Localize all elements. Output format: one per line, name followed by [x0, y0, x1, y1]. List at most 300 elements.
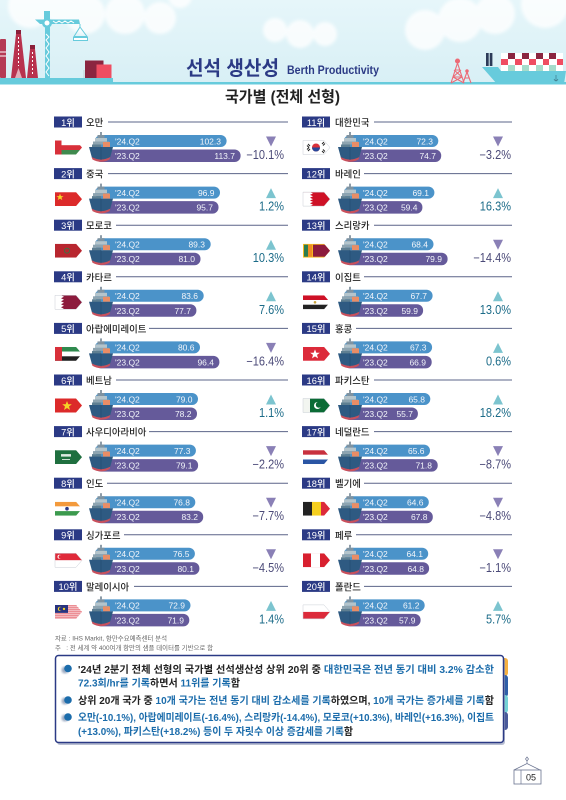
bar: 2024 Q2: 79.0 [176, 394, 193, 404]
page number tag [514, 757, 541, 784]
change: -10.1%: −10.1% [246, 148, 284, 162]
icon: ship [89, 235, 113, 265]
bar: 2024 Q2 [95, 393, 198, 405]
row: 6위 베트남 [54, 374, 288, 420]
change: 18.2% [480, 394, 511, 420]
bar: 2023 Q2: 113.7 [214, 151, 235, 161]
country name: 싱가포르 [86, 530, 121, 541]
bar: 2024 Q2 [344, 187, 434, 199]
bar: 2023 Q2: 95.7 [196, 203, 213, 213]
bar: 2024 Q2 [344, 135, 438, 147]
bar: 2024 Q2: 72.9 [168, 601, 185, 611]
change: -4.5%: −4.5% [252, 561, 284, 575]
ground strip [0, 82, 566, 84]
bar: 2024 Q2: 89.3 [188, 240, 205, 250]
change: 1.4%: 1.4% [259, 612, 284, 626]
country name: 사우디아라비아 [86, 427, 147, 438]
row: 19위 페루 [302, 529, 512, 575]
rank badge: 5위 [61, 323, 75, 334]
rank badge [54, 323, 82, 334]
change: 10.3% [253, 240, 284, 265]
bar: 2024 Q2: '24.Q2 [115, 601, 140, 611]
flag: Egypt [303, 295, 330, 309]
bar: 2023 Q2: '23.Q2 [363, 306, 388, 316]
callout tabs [500, 658, 508, 730]
title: 선석 생산성 [186, 57, 279, 80]
bar: 2024 Q2 [344, 238, 434, 250]
rank badge [302, 323, 330, 334]
bar: 2024 Q2: '24.Q2 [363, 240, 388, 250]
title [186, 57, 380, 80]
icon: ship [338, 338, 362, 368]
rank badge [302, 581, 330, 592]
bar: 2024 Q2 [95, 599, 190, 611]
icon: ship [338, 235, 362, 265]
title: Berth Productivity [287, 65, 380, 77]
bar: 2023 Q2: '23.Q2 [115, 254, 140, 264]
bar: 2024 Q2: '24.Q2 [363, 291, 388, 301]
rank badge: 15위 [307, 323, 325, 334]
icon: harbor crane [35, 11, 88, 78]
change: 13.0% [480, 291, 511, 317]
rank badge: 6위 [61, 375, 75, 386]
bar: 2024 Q2 [95, 496, 195, 508]
bar: 2023 Q2: '23.Q2 [363, 461, 388, 471]
rank badge: 19위 [307, 530, 325, 541]
flag: Pakistan [303, 398, 330, 412]
row: 8위 인도 [54, 478, 288, 523]
bar: 2023 Q2 [95, 304, 196, 317]
change: 13.0%: 13.0% [480, 303, 511, 317]
bar: 2024 Q2: '24.Q2 [363, 136, 388, 146]
bar: 2024 Q2 [344, 496, 429, 508]
icon: ship [338, 132, 362, 162]
icon: ship [89, 184, 113, 213]
bar: 2023 Q2 [344, 562, 429, 575]
rank badge: 18위 [307, 478, 325, 489]
flag: Oman [55, 140, 82, 155]
country name: 아랍에미레이트 [86, 323, 147, 334]
change: -14.4%: −14.4% [473, 251, 511, 265]
flag: Vietnam [55, 398, 82, 412]
icon: ship [89, 338, 113, 368]
bar: 2024 Q2: '24.Q2 [115, 343, 140, 353]
finding 1 [78, 663, 495, 690]
country name: 말레이시아 [86, 581, 130, 592]
rank badge: 8위 [61, 478, 75, 489]
rank badge [302, 374, 330, 386]
bar: 2023 Q2 [344, 356, 432, 368]
row: 5위 아랍에미레이트 [54, 323, 288, 368]
country name: 홍콩 [335, 323, 353, 334]
change: 7.6%: 7.6% [259, 303, 284, 317]
change: 7.6% [259, 291, 284, 317]
bar: 2024 Q2 [344, 341, 432, 353]
bar: 2023 Q2: 96.4 [197, 357, 214, 367]
flag: China [55, 192, 82, 206]
rank badge [302, 478, 330, 489]
bar: 2023 Q2: '23.Q2 [363, 564, 388, 574]
country name: 스리랑카 [335, 220, 370, 231]
rank badge [54, 220, 82, 231]
bar: 2023 Q2 [344, 304, 423, 317]
bar: 2023 Q2: 66.9 [409, 357, 426, 367]
bar: 2024 Q2 [95, 238, 211, 250]
bar: 2023 Q2 [95, 150, 241, 162]
icon: ship [89, 287, 113, 317]
change: -1.1%: −1.1% [480, 561, 511, 575]
bar: 2023 Q2: '23.Q2 [115, 461, 140, 471]
flag: UAE [55, 347, 82, 361]
bar: 2023 Q2 [95, 511, 203, 523]
source notes: 주 : 전 세계 약 400여개 항만의 샘플 데이터를 기반으로 함 [55, 643, 213, 652]
row: 10위 말레이시아 [54, 581, 288, 626]
bar: 2023 Q2: 55.7 [396, 409, 413, 419]
row: 2위 중국 [54, 168, 288, 214]
bar: 2024 Q2: 102.3 [200, 136, 221, 146]
country name: 이집트 [335, 272, 361, 283]
finding 2: 상위 20개 국가 중 10개 국가는 전년 동기 대비 감소세를 기록하였으며, 10개 국가는 증가세를 기록함 [78, 694, 495, 707]
bar: 2023 Q2: 79.9 [425, 254, 442, 264]
icon: ship [338, 287, 362, 317]
bar: 2023 Q2 [344, 253, 448, 265]
flag: Singapore [55, 553, 82, 567]
bar: 2023 Q2: '23.Q2 [115, 512, 140, 522]
row: 20위 폴란드 [302, 581, 512, 626]
rank badge: 12위 [307, 168, 325, 179]
header banner [0, 0, 566, 84]
rank badge [54, 426, 82, 437]
rank badge [302, 426, 330, 437]
bar: 2024 Q2 [95, 135, 227, 147]
bar: 2024 Q2 [95, 341, 200, 353]
change: -7.7% [252, 498, 284, 523]
country name: 네덜란드 [335, 427, 370, 438]
bar: 2024 Q2: '24.Q2 [363, 188, 388, 198]
change: 1.2% [259, 188, 284, 214]
bar: 2024 Q2: 65.6 [408, 446, 425, 456]
bar: 2023 Q2: '23.Q2 [363, 409, 388, 419]
change: -10.1% [246, 136, 284, 162]
bar: 2023 Q2: '23.Q2 [363, 512, 388, 522]
bar: 2024 Q2: 76.5 [173, 549, 190, 559]
country name: 페루 [335, 530, 353, 541]
bar: 2024 Q2: 67.7 [410, 291, 427, 301]
rank badge [302, 168, 330, 179]
rank badge: 7위 [61, 426, 75, 437]
change: -4.8%: −4.8% [480, 509, 511, 523]
icon: ship [89, 390, 113, 420]
bar: 2023 Q2 [95, 562, 199, 575]
change: -4.5% [252, 549, 284, 575]
country name: 바레인 [335, 169, 361, 180]
flag: India [55, 502, 82, 516]
bar: 2024 Q2: '24.Q2 [115, 188, 140, 198]
flag: Netherlands [303, 450, 330, 464]
flag: Qatar [55, 295, 82, 309]
bar: 2023 Q2: '23.Q2 [363, 357, 388, 367]
row: 11위 대한민국 [302, 116, 512, 162]
bar: 2023 Q2: 81.0 [178, 254, 195, 264]
rank badge [54, 168, 82, 179]
change: 5.7%: 5.7% [486, 612, 511, 626]
bar: 2023 Q2: 74.7 [419, 151, 436, 161]
icon: ship [338, 390, 362, 420]
row: 14위 이집트 [302, 271, 512, 317]
source notes [55, 634, 213, 652]
rank badge: 14위 [307, 272, 325, 283]
country name: 카타르 [86, 272, 112, 283]
flag: South Korea [303, 140, 330, 154]
icon: ship [89, 493, 113, 523]
icon: ship [338, 493, 362, 523]
country name: 대한민국 [335, 117, 370, 128]
bar: 2023 Q2: 80.1 [177, 564, 194, 574]
rank badge [54, 478, 82, 489]
change: -2.2% [252, 446, 284, 472]
bar: 2023 Q2: 59.9 [401, 306, 418, 316]
bar: 2023 Q2: 83.2 [181, 512, 198, 522]
change: 16.3% [480, 188, 511, 214]
country name: 폴란드 [335, 581, 361, 592]
bar: 2024 Q2 [95, 445, 196, 457]
bar: 2023 Q2 [344, 201, 422, 214]
icon: container ship [482, 53, 566, 84]
bar: 2023 Q2: '23.Q2 [115, 357, 140, 367]
rank badge: 1위 [61, 117, 75, 128]
finding 1: '24년 2분기 전체 선형의 국가별 선석생산성 상위 20위 중 대한민국은 전년 동기 대비 3.2% 감소한 [78, 663, 495, 676]
change: 0.6% [486, 343, 511, 368]
bar: 2023 Q2: '23.Q2 [363, 151, 388, 161]
icon: stacked containers [83, 60, 112, 78]
change: 16.3%: 16.3% [480, 200, 511, 214]
bar: 2023 Q2 [344, 408, 418, 420]
bar: 2024 Q2: '24.Q2 [115, 136, 140, 146]
bar: 2024 Q2 [344, 599, 425, 611]
bar: 2024 Q2: 64.6 [407, 498, 424, 508]
bar: 2023 Q2: '23.Q2 [115, 615, 140, 625]
row: 13위 스리랑카 [302, 220, 512, 265]
bar: 2024 Q2: 67.3 [410, 343, 427, 353]
bar: 2023 Q2: 71.8 [415, 461, 432, 471]
bar: 2023 Q2 [95, 356, 219, 368]
bar: 2023 Q2: '23.Q2 [363, 615, 388, 625]
bar: 2023 Q2: 77.7 [174, 306, 191, 316]
finding 3 [78, 711, 494, 738]
rank badge: 3위 [61, 220, 75, 231]
bar: 2023 Q2 [344, 150, 441, 162]
country name: 모로코 [86, 220, 112, 231]
rank badge [302, 529, 330, 541]
bar: 2023 Q2 [344, 511, 433, 523]
flag: Malaysia [55, 605, 82, 619]
flag: Hong Kong [303, 347, 330, 361]
row: 16위 파키스탄 [302, 374, 512, 420]
rank badge [54, 116, 82, 128]
rank badge: 20위 [307, 581, 325, 592]
rank badge [54, 581, 82, 592]
flag: Peru [303, 553, 330, 567]
bar: 2024 Q2: 65.8 [408, 394, 425, 404]
finding 3: (+13.0%), 파키스탄(+18.2%) 등이 두 자릿수 이상 증감세를 기록함 [78, 725, 353, 738]
bar: 2023 Q2: '23.Q2 [115, 306, 140, 316]
change: -3.2%: −3.2% [480, 148, 511, 162]
flag: Saudi Arabia [55, 450, 82, 464]
bar: 2024 Q2: '24.Q2 [115, 549, 140, 559]
clouds [8, 0, 566, 50]
icon: ship [338, 184, 362, 213]
change: 10.3%: 10.3% [253, 251, 284, 265]
icon: ship [338, 442, 362, 471]
change: -2.2%: −2.2% [252, 458, 284, 472]
bar: 2023 Q2: '23.Q2 [115, 409, 140, 419]
change: 1.1%: 1.1% [259, 406, 284, 420]
bar: 2023 Q2: '23.Q2 [363, 203, 388, 213]
change: -3.2% [480, 136, 511, 162]
row: 17위 네덜란드 [302, 426, 512, 472]
bar: 2024 Q2: '24.Q2 [363, 601, 388, 611]
bar: 2023 Q2: 64.8 [407, 564, 424, 574]
bar: 2024 Q2 [95, 290, 204, 302]
bar: 2023 Q2: '23.Q2 [363, 254, 388, 264]
bar: 2023 Q2: 67.8 [411, 512, 428, 522]
rank badge: 16위 [307, 375, 325, 386]
bar: 2023 Q2: 71.9 [167, 615, 184, 625]
change: 1.1% [259, 394, 284, 420]
bar: 2023 Q2: 78.2 [175, 409, 192, 419]
row: 4위 카타르 [54, 271, 288, 317]
rank badge: 17위 [307, 426, 325, 437]
bar: 2024 Q2: 69.1 [412, 188, 429, 198]
bar: 2023 Q2 [344, 459, 438, 472]
flag: Bahrain [303, 192, 330, 206]
flag: Morocco [55, 244, 82, 258]
bar: 2024 Q2: 72.3 [416, 136, 433, 146]
country name: 인도 [86, 478, 104, 489]
rank badge: 9위 [61, 530, 75, 541]
icon: ship [89, 545, 113, 575]
change: 1.2%: 1.2% [259, 200, 284, 214]
source notes: 자료 : IHS Markit, 항만수요예측센터 분석 [55, 634, 167, 642]
finding 1: 72.3회/hr를 기록하면서 11위를 기록함 [78, 676, 241, 690]
rank badge: 11위 [307, 117, 325, 128]
icon: radio towers [451, 59, 471, 83]
icon: ship [89, 442, 113, 471]
bar: 2024 Q2: 96.9 [198, 188, 215, 198]
bar: 2023 Q2: 57.9 [399, 615, 416, 625]
bar: 2024 Q2: 68.4 [411, 240, 428, 250]
bar: 2024 Q2: '24.Q2 [115, 291, 140, 301]
bar: 2024 Q2: '24.Q2 [363, 394, 388, 404]
bar: 2023 Q2 [95, 253, 200, 265]
rank badge [302, 271, 330, 283]
bar: 2023 Q2 [95, 201, 218, 214]
rank badge [54, 374, 82, 386]
bar: 2024 Q2 [344, 445, 430, 457]
change: -14.4% [473, 240, 511, 265]
flag: Belgium [303, 502, 330, 516]
rank badge: 10위 [59, 581, 77, 592]
row: 12위 바레인 [302, 168, 512, 214]
change: -7.7%: −7.7% [252, 509, 284, 523]
country name: 베트남 [86, 375, 112, 386]
country name: 벨기에 [335, 478, 361, 489]
rank badge [54, 271, 82, 283]
icon: ship [338, 545, 362, 575]
bar: 2023 Q2: '23.Q2 [115, 564, 140, 574]
row: 1위 오만 [54, 116, 288, 162]
row: 15위 홍콩 [302, 323, 512, 368]
rank badge: 13위 [307, 220, 325, 231]
bar: 2024 Q2: '24.Q2 [363, 549, 388, 559]
change: 0.6%: 0.6% [486, 354, 511, 368]
country name: 파키스탄 [335, 375, 370, 386]
flag: Sri Lanka [303, 244, 330, 258]
bar: 2024 Q2: '24.Q2 [363, 446, 388, 456]
country name: 중국 [86, 169, 104, 180]
bar: 2024 Q2: '24.Q2 [115, 240, 140, 250]
bar: 2024 Q2: 77.3 [174, 446, 191, 456]
bar: 2024 Q2: '24.Q2 [115, 446, 140, 456]
bar: 2024 Q2: '24.Q2 [363, 343, 388, 353]
subtitle: 국가별 (전체 선형) [225, 88, 340, 106]
rank badge: 2위 [61, 168, 75, 179]
change: -16.4% [246, 343, 284, 368]
country name: 오만 [86, 117, 104, 128]
change: -1.1% [480, 549, 511, 575]
rank badge [302, 220, 330, 231]
bar: 2024 Q2 [344, 290, 433, 302]
change: -8.7%: −8.7% [480, 458, 511, 472]
row: 3위 모로코 [54, 220, 288, 265]
bar: 2024 Q2 [95, 548, 195, 560]
change: 18.2%: 18.2% [480, 406, 511, 420]
bar: 2023 Q2: '23.Q2 [115, 203, 140, 213]
bar: 2024 Q2: 76.8 [173, 498, 190, 508]
change: -8.7% [480, 446, 511, 472]
callout: key findings [56, 656, 508, 745]
row: 9위 싱가포르 [54, 529, 288, 575]
flag: Poland [303, 605, 330, 619]
bar: 2023 Q2: '23.Q2 [115, 151, 140, 161]
bar: 2024 Q2: 83.6 [181, 291, 198, 301]
change: -16.4%: −16.4% [246, 354, 284, 368]
bar: 2023 Q2 [95, 459, 198, 472]
icon: refinery towers [0, 30, 38, 78]
rank badge [54, 529, 82, 541]
bar: 2023 Q2 [344, 614, 421, 626]
page number tag: 05 [526, 772, 536, 782]
bar: 2023 Q2: 79.1 [176, 461, 193, 471]
bar: 2024 Q2: 61.2 [403, 601, 420, 611]
bar: 2023 Q2 [95, 408, 197, 420]
row: 18위 벨기에 [302, 478, 512, 523]
rank badge: 4위 [61, 272, 75, 283]
row: 7위 사우디아라비아 [54, 426, 288, 472]
change: 1.4% [259, 601, 284, 626]
icon: ship [89, 132, 113, 162]
bar: 2024 Q2 [344, 548, 428, 560]
bar: 2023 Q2: 59.4 [401, 203, 418, 213]
bar: 2023 Q2 [95, 614, 189, 626]
bar: 2024 Q2: 80.6 [178, 343, 195, 353]
icon: ship [89, 596, 113, 626]
rank badge [302, 116, 330, 128]
bullets [62, 665, 72, 722]
bar: 2024 Q2: 64.1 [406, 549, 423, 559]
bar: 2024 Q2 [95, 187, 220, 199]
change: -4.8% [480, 498, 511, 523]
